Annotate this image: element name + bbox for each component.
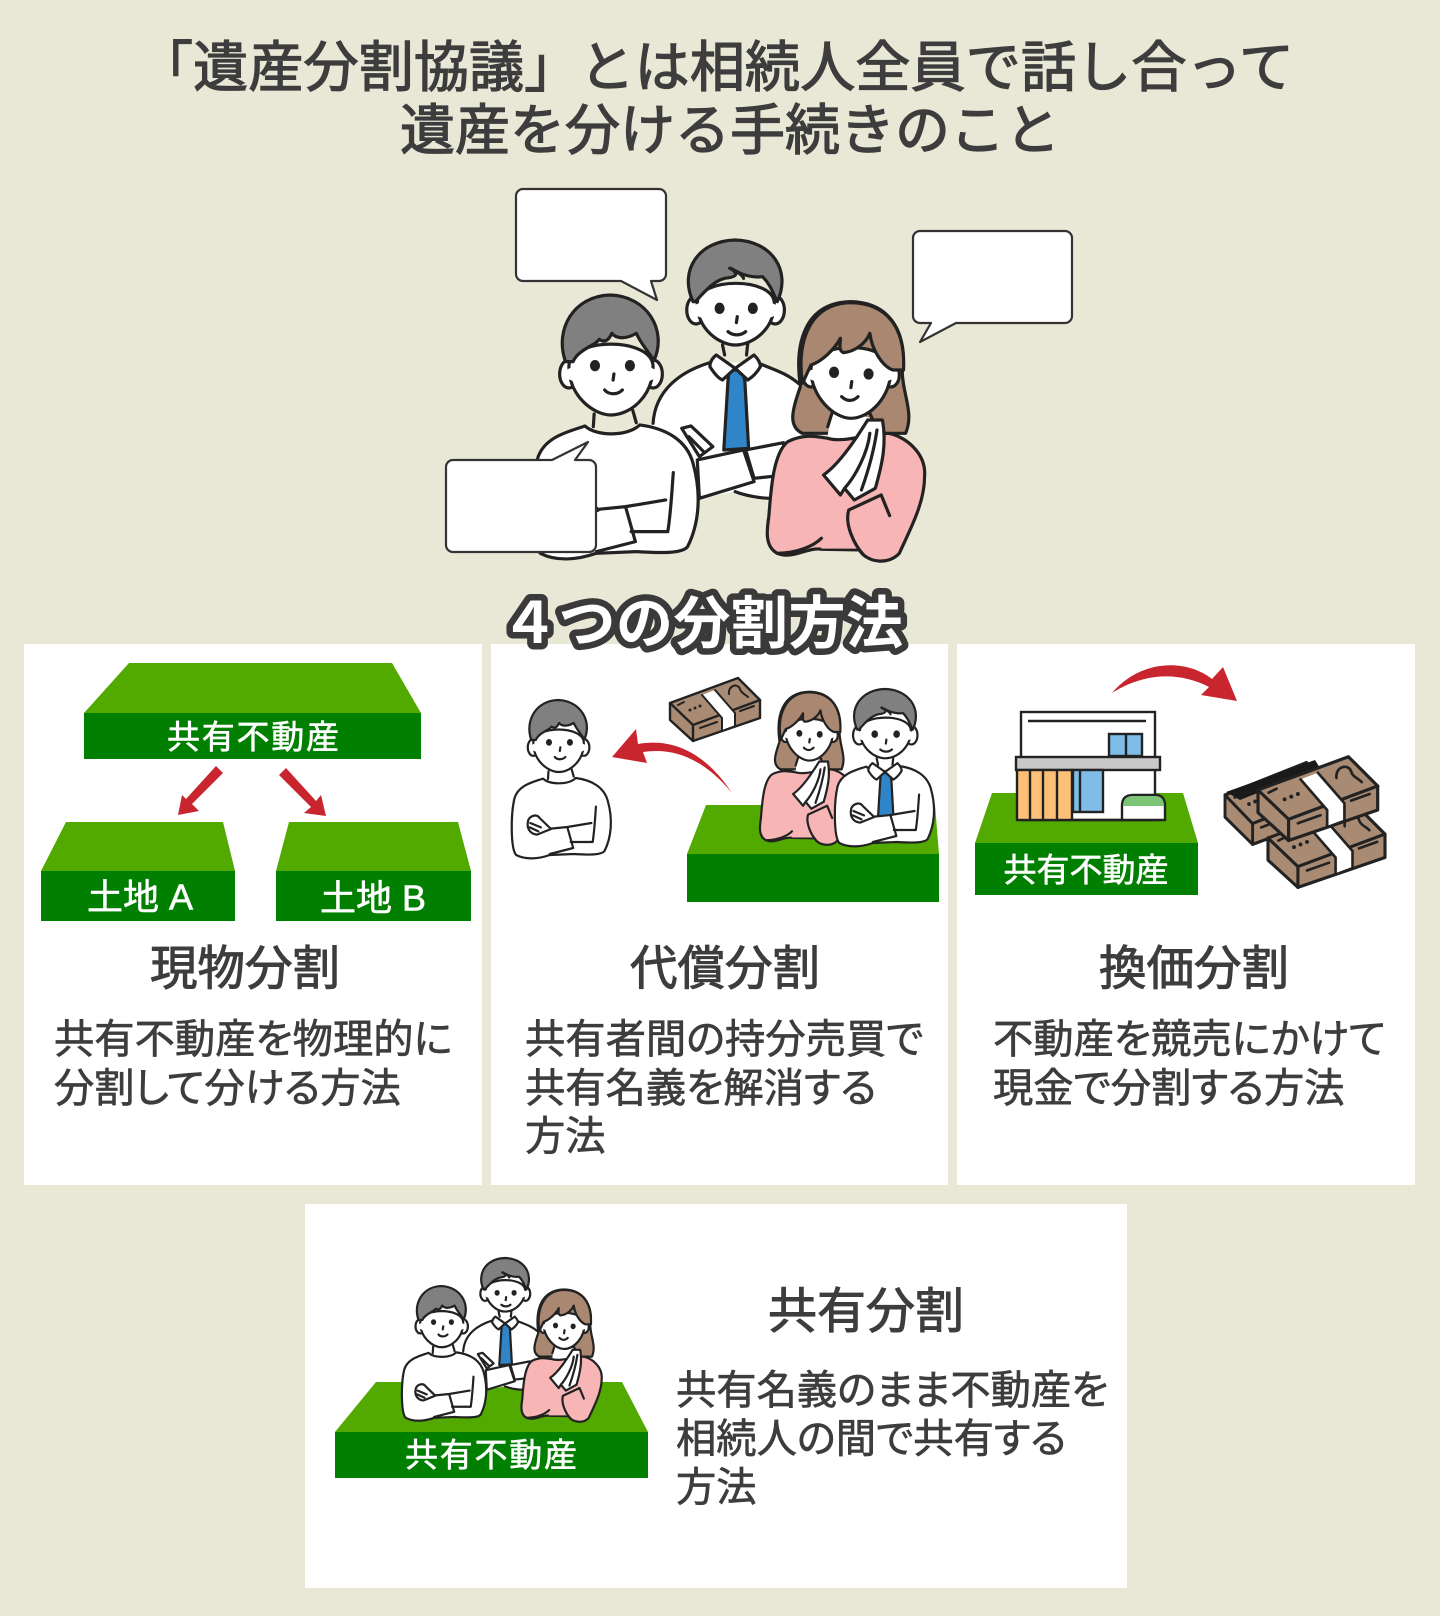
three people [533, 240, 925, 561]
description: 現金で分割する方法 [993, 1066, 1345, 1111]
arrow: property to cash [1112, 665, 1237, 701]
panel: 代償分割 [491, 644, 948, 1185]
land: 土地 A [41, 822, 235, 921]
speech bubble: top right [913, 231, 1072, 342]
people: three co-owners [402, 1258, 602, 1422]
land: 共有不動産: 共有不動産 [167, 718, 339, 756]
title [138, 36, 1294, 162]
description [525, 1017, 923, 1159]
description [993, 1017, 1386, 1111]
description: 相続人の間で共有する [676, 1416, 1066, 1462]
icon: money bundle [670, 678, 760, 741]
person: receiving heir [512, 700, 611, 858]
description: 不動産を競売にかけて [993, 1017, 1386, 1062]
land: 共有不動産: 共有不動産 [1004, 852, 1168, 888]
title: 遺産を分ける手続きのこと [400, 100, 1060, 162]
land: 土地 B: 土地 B [320, 878, 426, 918]
arrow: to land B [279, 768, 326, 816]
heading: 共有分割 [768, 1285, 964, 1339]
person: woman [760, 692, 853, 845]
title: 「遺産分割協議」とは相続人全員で話し合って [138, 36, 1294, 98]
land: 土地 B [276, 822, 471, 921]
description [676, 1368, 1108, 1510]
arrow: money to heir [612, 729, 732, 793]
description: 共有名義のまま不動産を [676, 1368, 1108, 1413]
heading: 現物分割 [150, 943, 340, 996]
heading: 代償分割 [630, 943, 820, 996]
description: 方法 [676, 1465, 757, 1510]
arrow: to land A [178, 766, 223, 815]
icon: cash stacks [1225, 757, 1385, 887]
land: 共有不動産 [975, 793, 1198, 895]
description: 共有者間の持分売買で [525, 1017, 923, 1062]
heading: 4つの分割方法: ４つの分割方法 [501, 592, 903, 656]
description [54, 1017, 452, 1111]
person: man with tie [835, 689, 934, 846]
people: co-owners [760, 689, 934, 846]
speech bubble: lower left [446, 442, 596, 552]
land: 共有不動産: 共有不動産 [405, 1436, 577, 1474]
description: 方法 [525, 1114, 606, 1159]
illustration: three heirs discussing with speech bubbles [446, 189, 1072, 561]
description: 共有不動産を物理的に [54, 1017, 452, 1062]
panel: 現物分割 [24, 644, 482, 1185]
land: 共有不動産 [687, 805, 939, 902]
speech bubble: top left [516, 189, 666, 300]
land: 共有不動産 [335, 1382, 648, 1478]
land: 土地 A: 土地 A [87, 876, 193, 918]
description: 分割して分ける方法 [54, 1066, 401, 1111]
heading: 換価分割 [1099, 943, 1289, 996]
land: 共有不動産 [84, 663, 421, 759]
icon: house [1016, 712, 1165, 820]
description: 共有名義を解消する [525, 1066, 877, 1111]
panel: 共有分割 [305, 1204, 1127, 1588]
panel: 換価分割 [957, 644, 1415, 1185]
